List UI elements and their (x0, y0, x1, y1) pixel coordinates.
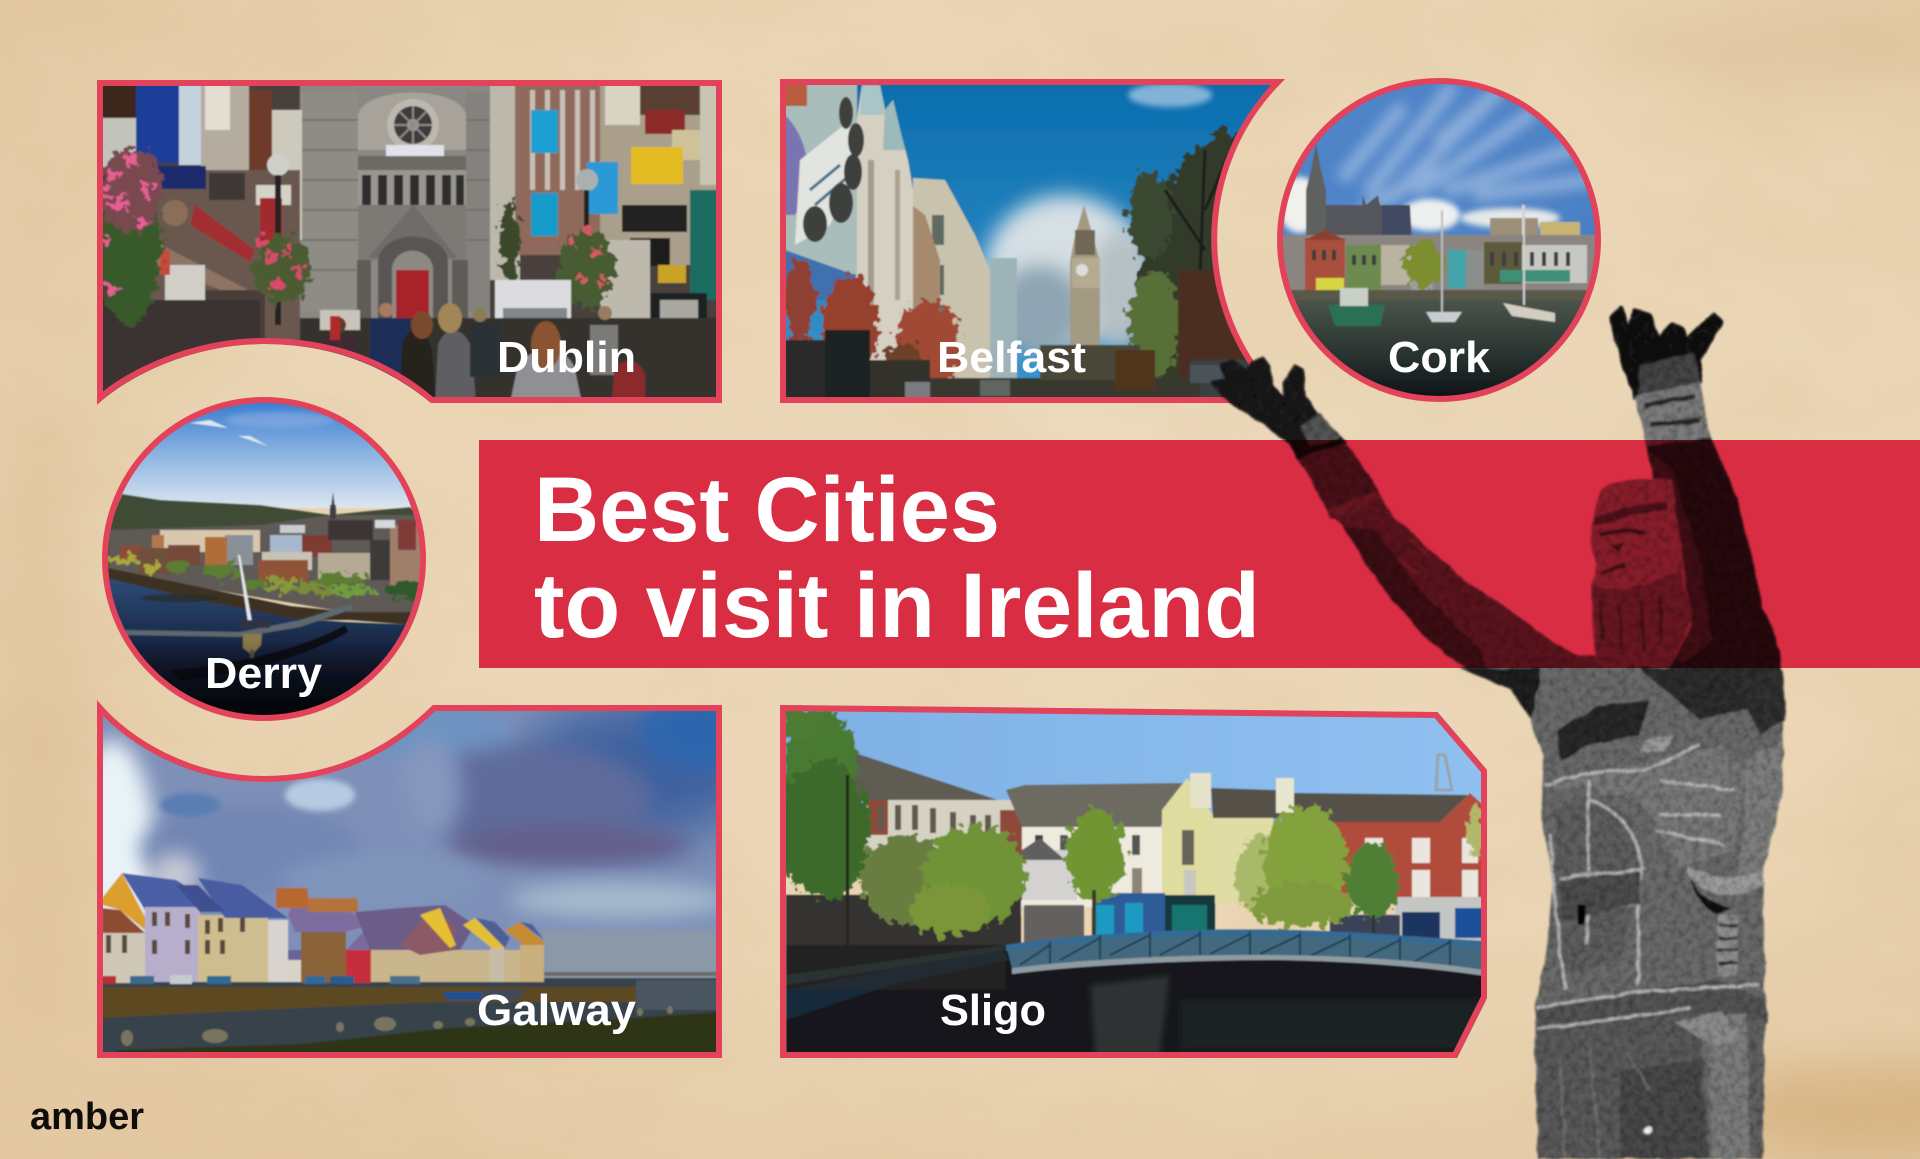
church (300, 85, 490, 325)
bridge (125, 604, 353, 637)
water (786, 945, 1486, 1060)
city (108, 514, 416, 613)
mid building (1006, 783, 1185, 827)
red trees (786, 256, 966, 380)
street (786, 339, 826, 397)
photo panel: Galway (97, 700, 722, 1058)
photo panel: Belfast (780, 79, 1290, 404)
buildings left (990, 258, 1017, 378)
right buildings (490, 85, 520, 280)
frame: Cork (1280, 81, 1598, 399)
dark ground floor left (786, 895, 1021, 970)
photo panel: Sligo (779, 700, 1490, 1060)
buildings row (1283, 234, 1595, 291)
far quay (540, 972, 720, 976)
frame: Galway (100, 708, 719, 1055)
label: Sligo: Sligo (940, 986, 1046, 1035)
cars (102, 975, 420, 984)
label: Belfast: Belfast (937, 333, 1086, 382)
photo panel: Derry (100, 396, 430, 725)
grass (102, 1012, 722, 1058)
left buildings (103, 86, 136, 118)
water (109, 578, 406, 715)
quay wall and road (108, 568, 412, 625)
frame: Sligo (783, 708, 1484, 1055)
quay (1291, 289, 1587, 302)
greenery (111, 556, 423, 600)
statue figure (1212, 308, 1785, 1159)
title: Best Cities (534, 459, 1000, 561)
boats (1328, 305, 1385, 326)
trees (779, 707, 1483, 936)
left building (840, 748, 1022, 825)
red title band (479, 440, 1920, 668)
water (103, 977, 716, 1052)
label: Dublin: Dublin (497, 333, 636, 382)
cathedral (1306, 143, 1326, 240)
left flowers (98, 148, 312, 325)
photo panel: Cork (1278, 78, 1602, 403)
photo panel: Dublin (97, 80, 722, 403)
title: to visit in Ireland (534, 555, 1260, 657)
label: Cork: Cork (1388, 333, 1491, 382)
frame: Dublin (100, 83, 719, 400)
crowd (300, 318, 720, 403)
label: Galway: Galway (477, 986, 637, 1035)
shopfronts (1024, 905, 1084, 955)
left railing (786, 947, 1010, 1020)
boats (442, 992, 482, 1000)
frame: Derry (105, 400, 423, 718)
label: Derry: Derry (205, 649, 323, 698)
windows (106, 912, 245, 954)
bridge (1006, 930, 1485, 970)
water (1296, 300, 1582, 396)
clock tower (1069, 205, 1101, 346)
birds (121, 1006, 673, 1046)
trees right (1128, 125, 1245, 400)
quay wall (102, 987, 636, 1018)
logo: amber: amber (30, 1096, 144, 1138)
houses (102, 933, 147, 983)
title (534, 459, 1260, 657)
right roof and walls (1211, 788, 1468, 822)
gable (1162, 778, 1213, 905)
frame: Belfast (783, 82, 1282, 400)
truck (494, 278, 572, 320)
